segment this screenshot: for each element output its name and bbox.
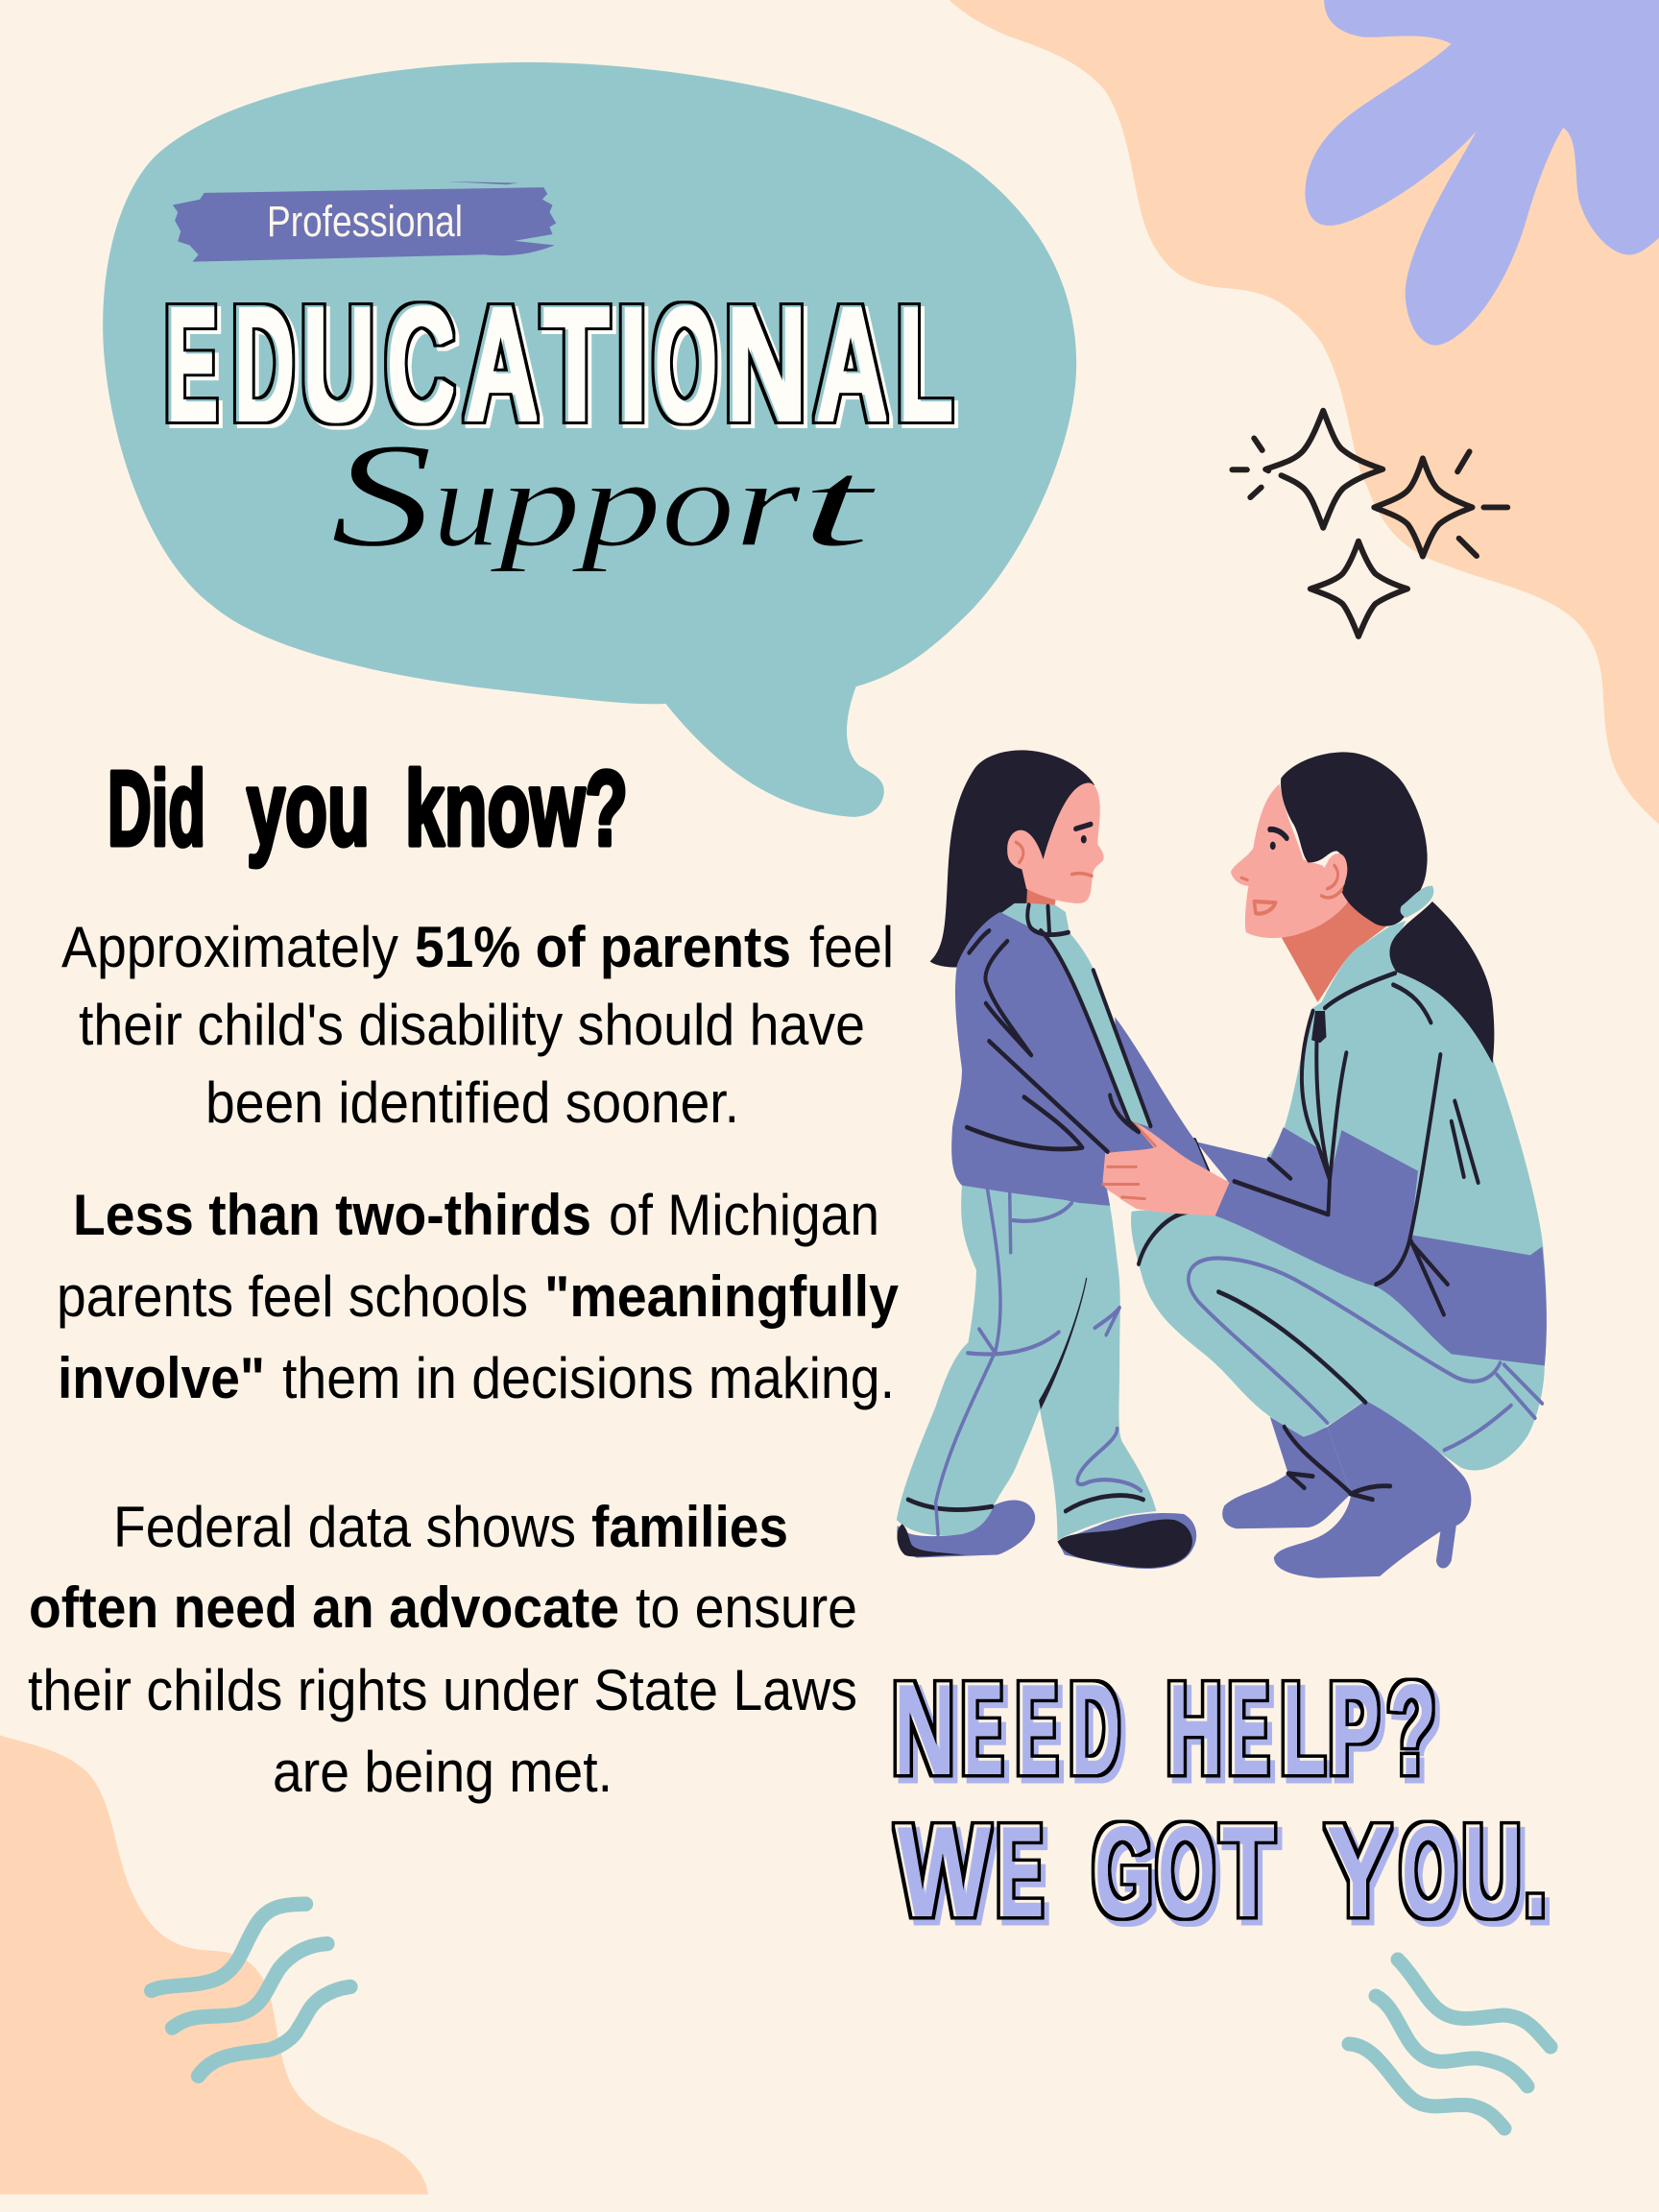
mother	[1131, 752, 1547, 1578]
paragraph: 51% of parents	[61, 915, 894, 1135]
title: EDUCATIONAL: T	[541, 273, 609, 455]
title: EDUCATIONAL: U	[301, 273, 374, 455]
brush stroke label: Professional	[173, 181, 556, 262]
speech bubble	[103, 62, 1076, 817]
callout: NEED HELP? WE GOT YOU.: E	[997, 1797, 1043, 1943]
paragraph: two-thirds of Michigan parents: involve"	[58, 1346, 265, 1410]
callout: NEED HELP? WE GOT YOU.: P	[1329, 1655, 1379, 1801]
paragraph: federal data	[28, 1495, 857, 1804]
title: Support: p	[571, 435, 661, 573]
heading: Did you know?: know?	[405, 750, 628, 868]
callout: NEED HELP? WE GOT YOU.: O	[1400, 1797, 1456, 1943]
heading: Did you know?: Did	[108, 750, 205, 868]
callout: NEED HELP? WE GOT YOU.: E	[962, 1655, 1002, 1801]
callout: NEED HELP? WE GOT YOU.	[892, 1655, 1546, 1943]
paragraph: two-thirds of Michigan parents: parents feel schools	[57, 1264, 528, 1329]
squiggles: bottom right	[1349, 1960, 1551, 2128]
callout: NEED HELP? WE GOT YOU.: U	[1462, 1797, 1521, 1943]
paragraph: two-thirds of Michigan parents: them in decisions making.	[282, 1346, 895, 1410]
paragraph: federal data: are being met.	[273, 1740, 613, 1804]
heading: Did you know?: you	[247, 750, 370, 868]
paragraph: two-thirds of Michigan parents: of Michigan	[609, 1183, 879, 1247]
paragraph: 51% of parents: their child's disability should have	[79, 993, 865, 1057]
callout: NEED HELP? WE GOT YOU.: G	[1093, 1797, 1152, 1943]
paragraph: federal data: to ensure	[636, 1575, 857, 1640]
paragraph: 51% of parents: Approximately	[61, 915, 398, 979]
illustration: mother and child	[897, 750, 1547, 1578]
title: EDUCATIONAL: A	[464, 273, 538, 455]
callout: NEED HELP? WE GOT YOU.: H	[1166, 1655, 1221, 1801]
title: EDUCATIONAL: L	[897, 273, 952, 455]
paragraph: federal data: often need an advocate	[29, 1575, 619, 1640]
title: Support: S	[330, 412, 433, 578]
child	[897, 750, 1230, 1569]
callout: NEED HELP? WE GOT YOU.: N	[892, 1655, 954, 1801]
title: EDUCATIONAL: O	[653, 273, 716, 455]
paragraph: 51% of parents: been identified sooner.	[205, 1070, 739, 1135]
title: EDUCATIONAL: I	[616, 273, 647, 455]
paragraph: federal data: their childs rights under State Laws	[28, 1658, 857, 1722]
callout: NEED HELP? WE GOT YOU.: W	[896, 1797, 990, 1943]
title: EDUCATIONAL: N	[724, 273, 806, 455]
title: EDUCATIONAL: A	[814, 273, 887, 455]
paragraph: two-thirds of Michigan parents	[57, 1183, 900, 1410]
paragraph: two-thirds of Michigan parents: "meaningfully	[544, 1264, 900, 1329]
title: Support: p	[490, 435, 581, 573]
peach blob: top right	[950, 0, 1659, 833]
title: EDUCATIONAL: E	[165, 273, 217, 455]
callout: NEED HELP? WE GOT YOU.: E	[1017, 1655, 1057, 1801]
callout: NEED HELP? WE GOT YOU.: O	[1156, 1797, 1214, 1943]
callout: NEED HELP? WE GOT YOU.: E	[1229, 1655, 1268, 1801]
callout: NEED HELP? WE GOT YOU.: .	[1525, 1797, 1546, 1943]
callout: NEED HELP? WE GOT YOU.: T	[1220, 1797, 1274, 1943]
paragraph: 51% of parents: 51% of parents	[415, 915, 791, 979]
brush stroke label: Professional: Professional	[267, 197, 463, 246]
title: Support: u	[433, 435, 499, 573]
paragraph: federal data: Federal data shows	[113, 1495, 576, 1559]
title: EDUCATIONAL: D	[232, 273, 294, 455]
callout: NEED HELP? WE GOT YOU.: Y	[1325, 1797, 1391, 1943]
paragraph: federal data: families	[591, 1495, 788, 1559]
callout: NEED HELP? WE GOT YOU.: D	[1070, 1655, 1119, 1801]
title: EDUCATIONAL: C	[385, 273, 454, 455]
sparkles	[1232, 411, 1507, 637]
paragraph: 51% of parents: feel	[809, 915, 894, 979]
title: Support: t	[799, 435, 878, 573]
peach blob: bottom left	[0, 1735, 428, 2195]
title: Support: o	[661, 435, 734, 573]
title: Support: r	[734, 435, 802, 573]
paragraph: two-thirds of Michigan parents: Less than two-thirds	[73, 1183, 591, 1247]
callout: NEED HELP? WE GOT YOU.: L	[1281, 1655, 1325, 1801]
lavender flower shape	[1305, 0, 1659, 346]
squiggles: bottom left	[152, 1904, 350, 2076]
callout: NEED HELP? WE GOT YOU.: ?	[1387, 1655, 1435, 1801]
